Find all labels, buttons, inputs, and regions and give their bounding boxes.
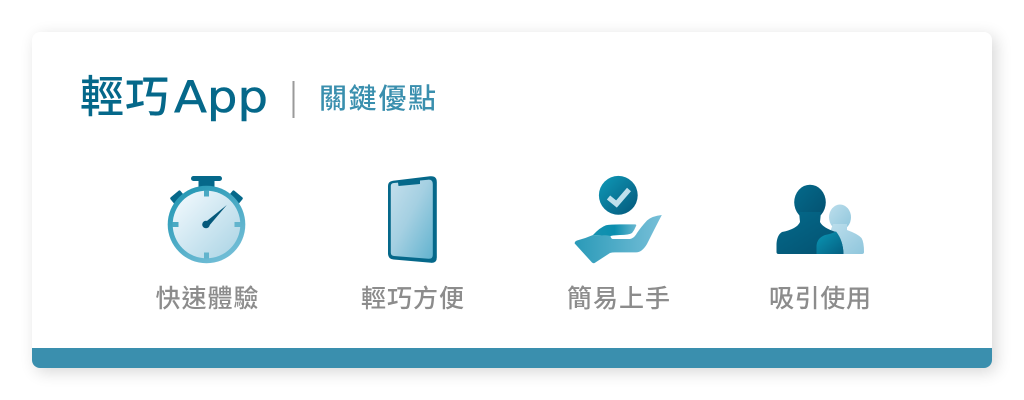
icon: users — [776, 185, 864, 254]
icon: stopwatch — [168, 176, 245, 263]
panel: card — [32, 32, 992, 368]
icon: phone — [388, 176, 437, 263]
label: 輕巧方便: 輕巧方便 — [361, 285, 464, 313]
subtitle: 關鍵優點 — [319, 83, 436, 114]
front person — [776, 185, 844, 254]
label: 簡易上手: 簡易上手 — [567, 285, 670, 313]
title — [80, 72, 268, 123]
label: 快速體驗: 快速體驗 — [156, 285, 258, 313]
overlap shoulder — [816, 232, 844, 254]
back person — [829, 204, 864, 254]
icon: hand with check — [575, 176, 662, 263]
label: 吸引使用: 吸引使用 — [769, 285, 871, 313]
title: App — [174, 72, 268, 123]
title: 輕巧 — [80, 73, 169, 122]
footer bar — [32, 348, 992, 368]
